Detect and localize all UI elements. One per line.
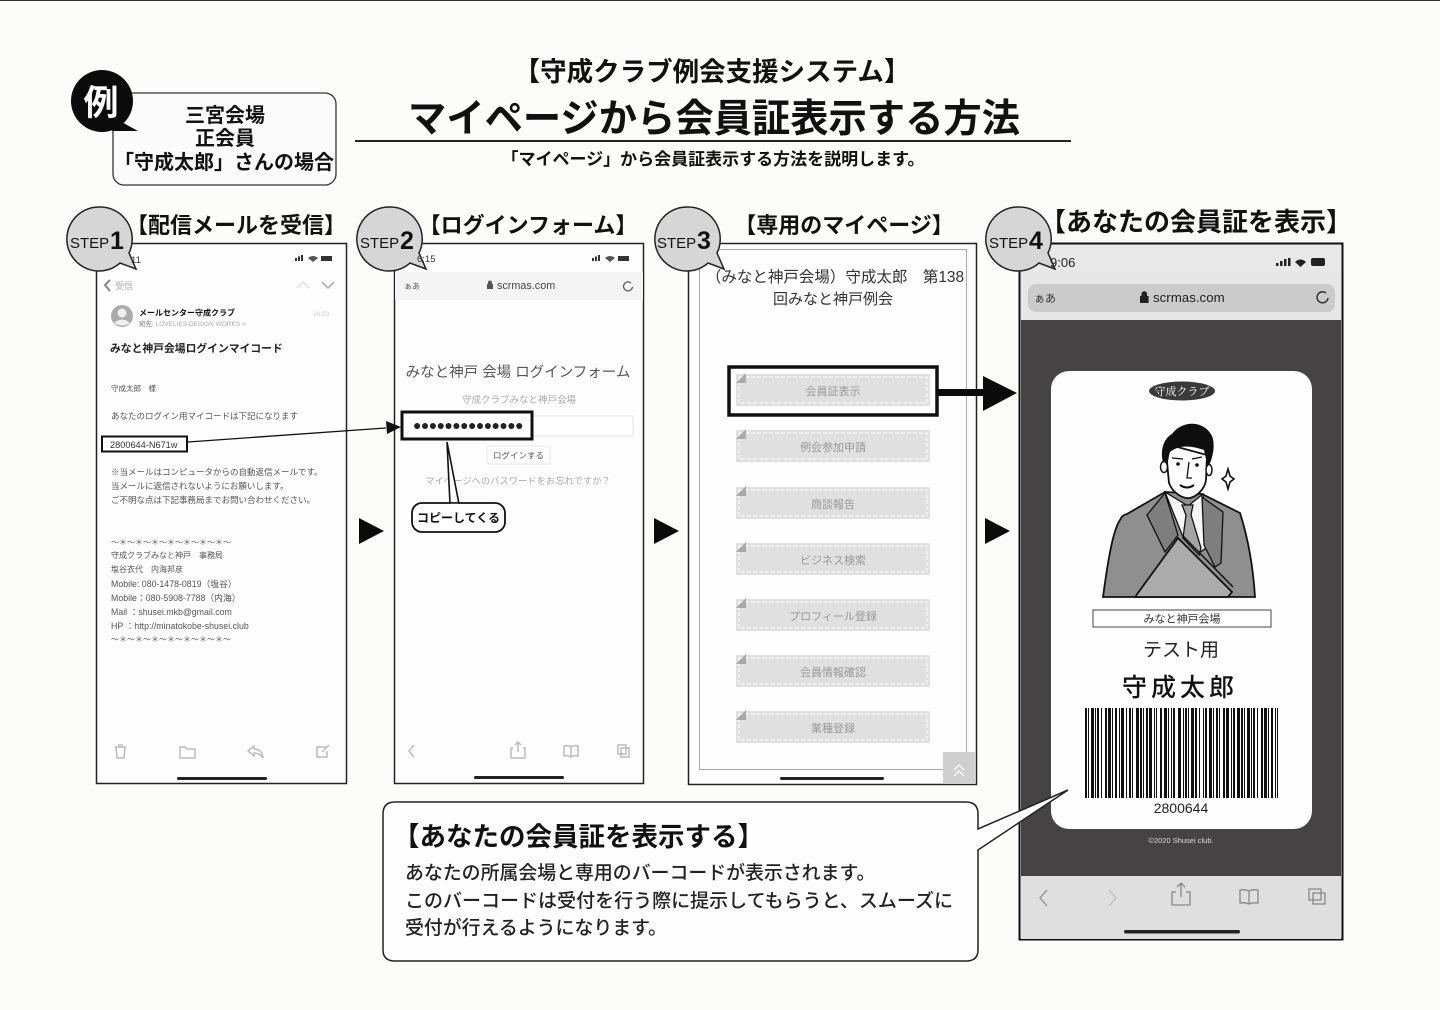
mail body: 〜＊〜＊〜＊〜＊〜＊〜＊〜＊〜 (111, 635, 231, 644)
member card menu highlight (729, 367, 937, 415)
example badge: 例 (83, 84, 119, 123)
arrow: step 3 to 4 (985, 518, 1010, 544)
browser bar: ぁあ (1034, 292, 1056, 305)
status time 1: 11 (131, 255, 141, 266)
club logo (1149, 382, 1215, 400)
bottom toolbar (1021, 876, 1341, 939)
menu: member card: 会員証表示 (806, 385, 860, 398)
status time 2: 6:15 (417, 254, 436, 265)
mail nav bar: 受信 (115, 280, 133, 291)
callout body: このバーコードは受付を行う際に提示してもらうと、スムーズに (405, 889, 953, 912)
callout heading: 【あなたの会員証を表示する】 (393, 822, 764, 852)
browser bar: scrmas.com (497, 280, 555, 292)
mail body: 塩谷衣代 内海邦彦 (111, 564, 183, 574)
step 1 heading: 【配信メールを受信】 (126, 213, 346, 238)
dark overlay (1021, 320, 1341, 876)
venue label: みなと神戸会場 (1144, 612, 1220, 626)
menu: industry (736, 710, 930, 743)
status icons (295, 255, 332, 262)
copyright: ©2020 Shusei club. (1148, 836, 1214, 845)
status time 4: 9:06 (1050, 255, 1075, 270)
arrow: code to input (188, 421, 401, 442)
menu: industry: 業種登録 (811, 721, 855, 735)
home indicator (780, 777, 884, 780)
panel: step 2 login form (394, 244, 644, 784)
callout: copy note (412, 442, 505, 532)
home indicator (177, 777, 267, 780)
step 4 badge (986, 207, 1055, 271)
example member box: 正会員 (195, 127, 255, 150)
step 1 badge: STEP (70, 235, 109, 252)
example callout (71, 70, 336, 185)
mail body (111, 383, 323, 644)
login button: ログインする (493, 450, 544, 460)
input field rest (533, 416, 633, 436)
page header: 回みなと神戸例会 (773, 291, 893, 308)
example member box: 三宮会場 (185, 104, 265, 127)
menu: member info (736, 654, 930, 687)
menu: business search: ビジネス検索 (800, 553, 866, 567)
step 2 badge (357, 207, 426, 271)
step 1 badge: 1 (110, 227, 124, 255)
mail header (139, 308, 330, 328)
menu: profile (736, 598, 930, 631)
mail body: 〜＊〜＊〜＊〜＊〜＊〜＊〜＊〜 (111, 538, 231, 547)
panel: step 3 my page (688, 244, 976, 784)
menu: member card (736, 373, 930, 406)
login button (487, 446, 550, 464)
step 2 heading: 【ログインフォーム】 (419, 213, 637, 238)
barcode number: 2800644 (1154, 800, 1208, 816)
callout: explanation (383, 790, 1068, 961)
status icons (1276, 258, 1325, 267)
club logo: 守成クラブ (1154, 384, 1210, 398)
form title: みなと神戸 会場 ログインフォーム (406, 364, 630, 381)
step 3 badge: STEP (657, 235, 696, 252)
mail subject: みなと神戸会場ログインマイコード (110, 341, 283, 355)
browser bar: scrmas.com (1153, 290, 1225, 305)
menu: business report: 商談報告 (811, 498, 855, 511)
callout body (405, 862, 953, 939)
page header: （みなと神戸会場）守成太郎 第138 (706, 268, 964, 286)
subtitle: 「マイページ」から会員証表示する方法を説明します。 (502, 149, 924, 169)
member type: テスト用 (1143, 640, 1219, 661)
browser bar: ぁあ (404, 282, 420, 291)
title: system name: 【守成クラブ例会支援システム】 (514, 57, 910, 87)
sender avatar (111, 305, 133, 327)
scroll-top button (943, 752, 975, 784)
panel: step 4 member card (1020, 244, 1342, 940)
step 3 badge: 3 (697, 227, 711, 255)
example member box (113, 93, 336, 185)
mail header: メールセンター守成クラブ (139, 308, 235, 318)
mail body: ご不明な点は下記事務局までお問い合わせください。 (111, 495, 315, 505)
example member box: 「守成太郎」さんの場合 (114, 150, 334, 174)
mail body: Mobile: 080-1478-0819（塩谷） (111, 578, 237, 589)
step 3 heading: 【専用のマイページ】 (734, 213, 954, 238)
mail body: ※当メールはコンピュータからの自動返信メールです。 (111, 467, 323, 477)
mail nav bar (105, 280, 334, 291)
title underline (355, 140, 1071, 142)
browser bar (395, 272, 643, 300)
mail body: Mobile：080-5908-7788（内海） (111, 592, 241, 603)
page header (706, 268, 964, 308)
home indicator (474, 776, 564, 779)
mail body: HP ：http://minatokobe-shusei.club (111, 621, 249, 631)
card (1051, 371, 1312, 829)
step 4 heading: 【あなたの会員証を表示】 (1040, 207, 1352, 237)
callout body: あなたの所属会場と専用のバーコードが表示されます。 (405, 862, 875, 884)
callout body: 受付が行えるようになります。 (405, 917, 667, 939)
example badge (71, 70, 138, 132)
forgot password link: マイページへのパスワードをお忘れですか？ (425, 476, 611, 486)
venue label (1093, 610, 1271, 627)
toolbar icons (409, 742, 629, 758)
arrow: member card to step 4 (937, 376, 1017, 411)
arrow: step 1 to 2 (359, 518, 384, 544)
form venue label: 守成クラブみなと神戸会場 (462, 394, 576, 406)
callout: copy note: コピーしてくる (417, 511, 500, 525)
step 4 badge: STEP (989, 235, 1028, 252)
login code highlight: 2800644-N671w (110, 440, 178, 450)
step 2 badge: STEP (360, 235, 399, 252)
step 2 badge: 2 (400, 227, 414, 255)
step 3 badge (655, 207, 724, 271)
menu: meeting entry: 例会参加申請 (800, 440, 866, 454)
password input highlight (402, 412, 532, 439)
arrow: step 2 to 3 (654, 518, 679, 544)
mail body: あなたのログイン用マイコードは下記になります (111, 411, 298, 421)
member name: 守成太郎 (1122, 674, 1238, 702)
mail body: Mail ：shusei.mkb@gmail.com (111, 607, 232, 617)
barcode (1085, 708, 1278, 798)
mail body: 守成クラブみなと神戸 事務局 (111, 550, 223, 560)
browser bar (1021, 272, 1341, 320)
mail header: 宛先: LOVELIES DESIGN WORKS > (139, 319, 246, 328)
mail toolbar icons (115, 745, 329, 758)
menu: member info: 会員情報確認 (800, 666, 866, 679)
password input highlight: ●●●●●●●●●●●●●● (413, 417, 523, 433)
heading: main title: マイページから会員証表示する方法 (408, 98, 1020, 141)
menu: meeting entry (736, 429, 930, 462)
mail body: 当メールに返信されないようにお願いします。 (111, 481, 288, 491)
panel: step 1 mail (96, 244, 346, 784)
status icons (592, 255, 629, 262)
login code highlight (102, 436, 187, 452)
menu: business search (736, 542, 930, 575)
mail header: 16:53 (313, 311, 330, 318)
mail body: 守成太郎 様 (111, 383, 156, 393)
illustration: businessman (1103, 424, 1255, 597)
menu: profile: プロフィール登録 (789, 609, 877, 623)
step 4 badge: 4 (1029, 227, 1043, 255)
menu: business report (736, 486, 930, 519)
step 1 badge (67, 207, 136, 271)
